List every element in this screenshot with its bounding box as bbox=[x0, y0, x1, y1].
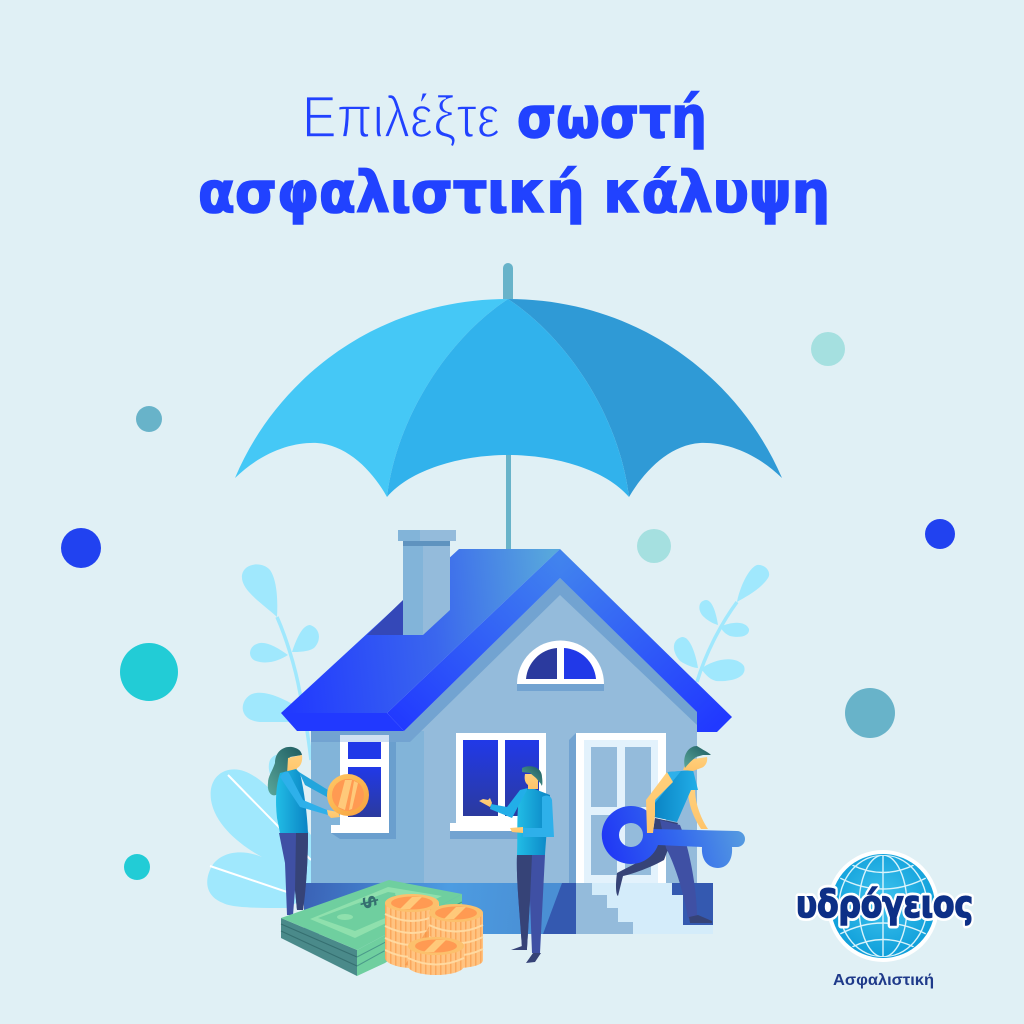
roof shadow by chimney bbox=[367, 600, 403, 635]
left window bbox=[331, 735, 396, 839]
decorative circles bbox=[61, 332, 955, 880]
right foundation bbox=[672, 883, 713, 925]
title line 1 bold: σωστή bbox=[517, 85, 707, 151]
arm front bbox=[523, 796, 554, 837]
legs bbox=[279, 833, 308, 915]
torso bbox=[517, 788, 550, 855]
globe bbox=[827, 850, 939, 962]
logo wordmark outline: υδρόγειος bbox=[796, 883, 973, 926]
legs bbox=[517, 855, 545, 953]
coin bbox=[327, 774, 369, 816]
front arm bbox=[280, 771, 328, 815]
plant right bbox=[674, 565, 769, 682]
face bbox=[525, 774, 538, 789]
umbrella bbox=[235, 263, 782, 552]
walls bbox=[311, 578, 697, 883]
dollar sign: $ bbox=[357, 892, 384, 912]
shoes bbox=[511, 946, 541, 963]
face bbox=[287, 755, 302, 775]
stack back right bbox=[429, 904, 483, 968]
roof ridge band left bbox=[387, 549, 560, 731]
hair bbox=[684, 746, 711, 768]
shoe bbox=[689, 915, 712, 923]
umbrella pole bbox=[503, 263, 513, 552]
hair bbox=[522, 766, 542, 786]
title bbox=[198, 85, 830, 226]
chimney bbox=[398, 530, 456, 635]
stack front bbox=[408, 937, 464, 975]
umbrella middle panel bbox=[387, 299, 629, 497]
torso bbox=[276, 769, 308, 833]
plant left bbox=[242, 564, 319, 760]
front leg bbox=[660, 820, 697, 918]
steps bbox=[576, 883, 633, 934]
man with key bbox=[602, 746, 745, 923]
umbrella left panel bbox=[235, 299, 508, 497]
logo wordmark: υδρόγειος bbox=[796, 883, 973, 926]
man center bbox=[479, 766, 554, 963]
hand bbox=[479, 798, 492, 807]
logo bbox=[796, 850, 973, 989]
arched window bbox=[517, 640, 604, 691]
title line 2 bold: ασφαλιστική κάλυψη bbox=[198, 160, 830, 226]
arm left bbox=[490, 788, 528, 818]
far arm bbox=[688, 789, 708, 829]
middle window bbox=[450, 733, 546, 839]
umbrella right panel bbox=[508, 299, 782, 497]
coin stacks bbox=[385, 894, 483, 975]
roof left plane bbox=[281, 549, 560, 713]
trailing leg bbox=[616, 818, 678, 896]
small hand bbox=[510, 827, 523, 833]
hand bbox=[327, 810, 340, 818]
big leaves behind woman bbox=[207, 754, 311, 908]
foundation bbox=[304, 883, 576, 934]
title line 1 light: Επιλέξτε bbox=[302, 85, 500, 150]
face bbox=[683, 757, 707, 771]
roof ridge band right bbox=[560, 549, 732, 732]
door bbox=[569, 733, 666, 883]
torso bbox=[654, 770, 698, 822]
near arm bbox=[646, 772, 673, 833]
stack back left bbox=[385, 894, 439, 968]
gable shadow bbox=[311, 578, 697, 742]
hair bbox=[268, 747, 302, 795]
key bbox=[602, 806, 745, 868]
woman with coin bbox=[268, 747, 369, 915]
house bbox=[281, 530, 732, 934]
logo subtitle: Ασφαλιστική bbox=[833, 972, 934, 989]
money stack bbox=[281, 880, 462, 976]
back arm bbox=[299, 772, 328, 797]
left darker wall bbox=[311, 731, 424, 883]
roof front edge left bbox=[281, 713, 404, 731]
foundation shaded wedge bbox=[543, 883, 576, 934]
